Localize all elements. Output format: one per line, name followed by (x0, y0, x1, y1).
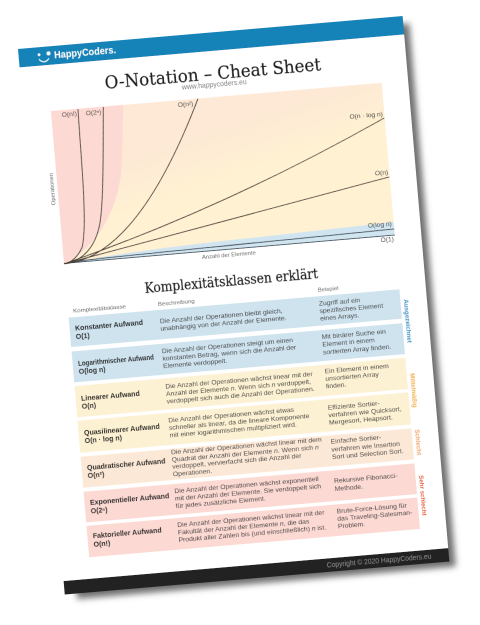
rating label: Ausgezeichnet: Ausgezeichnet (402, 299, 413, 343)
row: quasilinear: Effiziente Sortier- (328, 400, 380, 412)
row: factorial: O(n!) (93, 540, 111, 549)
row: logarithmic: Element in einem (322, 337, 375, 349)
row: constant: O(1) (76, 333, 90, 341)
row: linear: Linearer Aufwand (81, 391, 140, 403)
row: linear: finden. (326, 382, 347, 391)
column headers: Beispiel (318, 286, 339, 294)
row: exponential: Methode. (334, 483, 363, 493)
row: logarithmic: konstanten Betrag, wenn sich die Anzahl der (162, 344, 297, 363)
icon: smiley logo (37, 51, 51, 62)
row: quasilinear: Mergesort, Heapsort. (329, 415, 393, 427)
row: constant: spezifisches Element (319, 303, 384, 315)
column headers (73, 286, 339, 315)
curve O(n squared) (51, 99, 211, 264)
row: quadratic: Die Anzahl der Operationen wächst linear mit dem (171, 437, 322, 457)
row: quadratic: Quadratischer Aufwand (87, 458, 166, 472)
row: logarithmic: sortierten Array finden. (323, 344, 392, 356)
row: constant: Zugriff auf ein (319, 297, 360, 308)
curve labels: O(1) (380, 236, 394, 244)
column headers: Komplexitätsklasse (73, 304, 127, 315)
curve labels: O(2ⁿ) (85, 109, 102, 117)
section heading: Komplexitätsklassen erklärt (144, 266, 319, 297)
row: quadratic: O(n²) (87, 472, 105, 480)
row: logarithmic (72, 323, 405, 382)
row: constant: Die Anzahl der Operationen bleibt gleich, (160, 308, 283, 325)
row: exponential: Exponentieller Aufwand (90, 493, 170, 507)
row: constant: unabhängig von der Anzahl der Elemente. (160, 315, 287, 333)
row: constant: Konstanter Aufwand (75, 320, 143, 333)
curve labels (62, 85, 394, 270)
rating label: Mittelmäßig: Mittelmäßig (408, 373, 418, 408)
row: logarithmic: O(log n) (79, 367, 106, 376)
copyright: Copyright © 2020 HappyCoders.eu (326, 552, 432, 570)
row: constant (69, 289, 402, 347)
rating label: Sehr schlecht: Sehr schlecht (417, 475, 427, 516)
chart zone: blue (63, 222, 395, 264)
row: logarithmic: Mit binärer Suche ein (321, 329, 386, 341)
curve O(n log n) (54, 118, 394, 264)
curve labels: O(n!) (62, 111, 77, 119)
curve labels: O(n) (375, 170, 388, 178)
row: exponential: Die Anzahl der Operationen wächst exponentiell (174, 476, 319, 495)
row: quadratic: Sort und Selection Sort. (332, 448, 404, 461)
curve O(1) (64, 235, 395, 263)
row: quasilinear: mit einer logarithmischen multipliziert wird. (169, 422, 297, 440)
row: factorial (86, 498, 420, 557)
row: quasilinear: schneller als linear, da die lineare Komponente (169, 413, 310, 432)
curve O(n) (59, 177, 394, 264)
row: quasilinear: O(n · log n) (84, 435, 122, 445)
row: exponential: mit der Anzahl der Elemente. Sie verdoppelt sich (175, 483, 322, 503)
row: linear: Die Anzahl der Operationen wächst linear mit der (165, 371, 313, 391)
row: factorial: Problem. (338, 521, 365, 530)
row: logarithmic: Elemente verdoppelt. (163, 358, 228, 370)
row: linear: O(n) (82, 403, 96, 411)
chart: complexity curves (43, 83, 396, 273)
row: linear: unsortierten Array (325, 371, 379, 383)
curve O(2 to the n) (51, 107, 116, 264)
row: quasilinear (77, 392, 411, 453)
row: factorial: das Traveling-Salesman- (337, 510, 413, 523)
column headers: Beschreibung (158, 299, 195, 308)
website url: www.happycoders.eu (181, 79, 247, 92)
row: logarithmic: Logarithmischer Aufwand (78, 355, 154, 368)
row: exponential (84, 463, 417, 522)
rating label: Schlecht: Schlecht (413, 429, 422, 455)
chart zone: red (51, 105, 136, 264)
row: exponential: Rekursive Fibonacci- (334, 473, 398, 485)
footer band (64, 548, 449, 594)
row: linear (75, 358, 408, 417)
row: factorial: Faktorieller Aufwand (93, 527, 162, 540)
curve O(n factorial) (51, 109, 91, 264)
row: quadratic: Operationen. (173, 468, 212, 478)
row: linear: verdoppelt sich auch die Anzahl der Operationen. (166, 386, 315, 406)
curve labels: O(n²) (178, 101, 194, 109)
row: factorial: Die Anzahl der Operationen wächst linear mit der (177, 510, 325, 529)
row: quasilinear: Quasilinearer Aufwand (84, 424, 160, 437)
chart background: orange and yellow zone (51, 83, 395, 264)
x axis label: Anzahl der Elemente (202, 250, 257, 261)
curve O(log n) (63, 229, 395, 264)
curve labels: O(log n) (368, 221, 392, 230)
title: O-Notation – Cheat Sheet (104, 54, 323, 94)
row: logarithmic: Die Anzahl der Operationen steigt um einen (162, 337, 293, 355)
row: exponential: O(2ⁿ) (91, 507, 108, 515)
row: constant: eines Arrays. (320, 313, 360, 323)
row: linear: Ein Element in einem (324, 363, 389, 375)
row: quadratic: Einfache Sortier- (330, 435, 381, 446)
row: exponential: für jedes zusätzliche Element. (175, 496, 266, 510)
row: quasilinear: Die Anzahl der Operationen wächst etwas (168, 407, 294, 425)
row: factorial: Produkt aller Zahlen bis (und einschließlich) n ist. (178, 525, 326, 544)
row: quadratic: Quadrat der Anzahl der Elemente n. Wenn sich n (171, 444, 319, 464)
y axis label: Operationen (49, 173, 57, 205)
logo text: HappyCoders. (54, 45, 117, 61)
row: quadratic: verfahren wie Insertion (331, 441, 400, 453)
row: quasilinear: verfahren wie Quicksort, (328, 406, 402, 419)
row: quadratic (81, 428, 414, 488)
curve labels: O(n · log n) (349, 111, 383, 121)
row: quadratic: verdoppelt, vervierfacht sich die Anzahl der (172, 453, 302, 471)
row: linear: Anzahl der Elemente n. Wenn sich n verdoppelt, (166, 379, 311, 398)
header band with logo (18, 16, 404, 67)
row: factorial: Brute-Force-Lösung für (336, 502, 407, 515)
row: factorial: Fakultät der Anzahl der Elemente n, die das (178, 518, 310, 537)
